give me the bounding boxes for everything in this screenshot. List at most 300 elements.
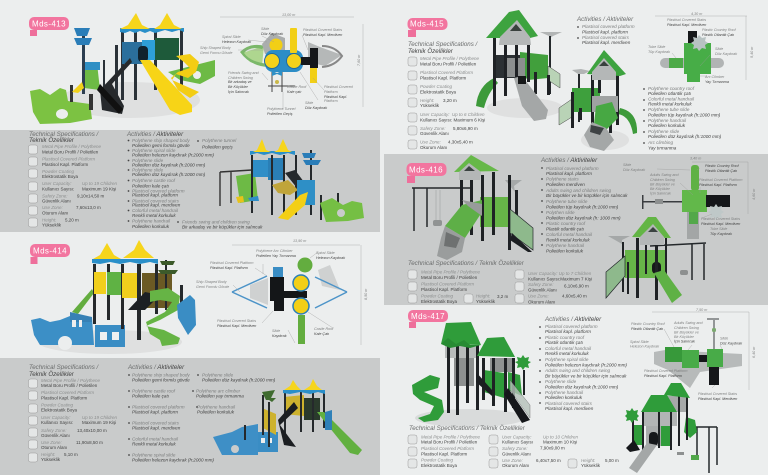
activities list: Plastik otlantik çatı [546, 226, 585, 232]
spec list: 3,20 m [443, 98, 457, 103]
plan drawing: Mds-413: Plastisol Covered Stairs [303, 28, 342, 32]
playground render: Mds-413 rear view [220, 139, 364, 222]
heading: technical specifications [29, 131, 100, 144]
activities list [539, 316, 627, 411]
spec list: 4,30x5,40 m [448, 140, 473, 144]
activities list: Plastik otlantik çatı [545, 340, 584, 345]
plan drawing: Mds-415: Arc Climber [704, 75, 725, 79]
spec list: Plastisol Covered Platform [420, 70, 473, 75]
plan drawing: Mds-415: Tüp Kaydırak [648, 50, 670, 54]
plan drawing: Mds-414: Polietilen Yay Tırmanma [256, 254, 296, 258]
spec list: Metal Boru Profili / Polietilen [421, 440, 478, 444]
plan drawing: Mds-416: Bir Küçükler [650, 187, 671, 191]
plan drawing: Mds-414: 13,90 m [293, 239, 306, 243]
spec list [408, 56, 485, 150]
plan drawing: Mds-417: 7,50 m [696, 308, 707, 312]
product tag: Mds-413 [29, 17, 69, 36]
plan drawing: Mds-417: Bir Küçükler [674, 335, 695, 339]
activities list [540, 157, 628, 254]
spec list: Safety Zone: [420, 126, 446, 131]
activities list: Plastisol covered platform [132, 404, 185, 410]
spec list: Use Zone: [528, 294, 550, 298]
spec list: Plastisol Covered Platform [421, 282, 474, 286]
activities list: Polietilen düz kaydırak (h:2000 mm) [132, 162, 206, 168]
activities list: Polietilen düz kaydırak (h:1000 mm) [545, 384, 619, 390]
activities list: Activities / Aktiviteler [544, 316, 602, 323]
plan drawing: Mds-413: Plastisol Covered [324, 85, 354, 89]
spec list: Powder Coating [42, 169, 75, 174]
activities list: Polythene castle roof [132, 388, 176, 394]
plan drawing: Mds-413: Castle Roof [287, 85, 307, 89]
activities list: Polietilen helezon kaydırak (h:2000 mm) [132, 152, 214, 158]
activities list: Polythene slide [202, 372, 234, 378]
activities list: Polythene handrail [132, 218, 171, 224]
plan drawing: Mds-415: Yay Tırmanma [705, 80, 729, 84]
activities list: Mds-415 bottom: Yay tırmanma [648, 146, 677, 150]
spec list: Plastisol Covered Platform [42, 156, 95, 162]
spec list: Up to 6 Children [452, 112, 485, 117]
activities list: Polythene spiral slide [132, 148, 176, 153]
spec list: 7,60x13,0 m [76, 205, 101, 210]
spec list: User Capacity: [41, 415, 71, 420]
spec list: 4,60x5,40 m [562, 294, 587, 298]
activities list: Polietilen geçiş [202, 144, 233, 150]
spec list: User Capacity: [502, 434, 532, 440]
product tag: Mds-417: Mds-417 [411, 312, 445, 321]
activities list: Colorful metal handrail [546, 232, 593, 237]
playground render: Mds-416 rear view [606, 217, 706, 303]
spec list: Plastisol Kapl. Platform [421, 452, 468, 456]
spec list: Safety Zone: [42, 194, 68, 198]
plan drawing: Mds-417: Plastisol Covered Platform [644, 369, 687, 373]
heading: technical specifications [408, 41, 479, 55]
plan drawing: Mds-413: Children Swing [228, 76, 254, 80]
panel: Mds-414 [30, 239, 368, 354]
activities list: Friends swing and children swing [182, 220, 250, 224]
plan drawing: Mds-415: Tube Slide [648, 45, 665, 49]
activities list: Polietilen korkuluk [132, 224, 170, 229]
spec list: Height: [581, 458, 596, 463]
panel: Mds-414 specifications [28, 364, 362, 462]
plan drawing: Mds-413: Polythene Tunnel [267, 107, 296, 111]
plan drawing: Mds-416: Plastisol Covered Platform [699, 178, 742, 182]
activities list: Bir arkadaş ve bir küçükler için salıncak [182, 224, 263, 230]
activities list: Polythene slide [545, 379, 577, 384]
plan drawing: Mds-413: Bir arkadaş ve [228, 80, 252, 84]
spec list: Metal Pipe Profile / Polythene [421, 270, 481, 274]
plan drawing: Mds-416: Bir Büyükler ve [650, 182, 675, 186]
activities list [126, 131, 263, 230]
spec list: Powder Coating [421, 294, 454, 298]
spec list: Güvenlik Alanı [502, 452, 531, 456]
playground render: Mds-414 [31, 240, 196, 354]
spec list: Okurum Alanı [502, 463, 529, 468]
plan drawing: Mds-416: Plastisol Kapl. Merdiven [701, 222, 740, 226]
activities list: Polythene tube slide [546, 199, 588, 204]
plan drawing: Mds-416: Tüp Kaydırak [710, 232, 732, 236]
plan drawing: Mds-414: Castle Roof [314, 327, 334, 331]
activities list: Plastisol kapl. platform [545, 329, 591, 334]
plan drawing: Mds-415: Slide [715, 47, 723, 51]
product tag: Mds-415 [408, 18, 448, 37]
spec list: 5,10 m [64, 452, 78, 457]
spec list: Yükseklik [476, 299, 496, 304]
panel: Mds-415 [408, 10, 754, 151]
activities list: Renkli metal korkuluk [132, 442, 176, 446]
spec list: Metal Boru Profili / Polietilen [421, 275, 478, 280]
playground render: Mds-416 front view [412, 155, 533, 260]
plan drawing: Mds-415: Plastik Otlantik Çatı [702, 33, 734, 37]
spec list: Metal Pipe Profile / Polythene [420, 56, 480, 61]
activities list: Polietilen gemi formlu gövde [132, 378, 190, 382]
activities list: Plastisol kapl. platform [132, 410, 178, 414]
activities list: Plastisol covered platform [132, 188, 185, 194]
activities list: Plastisol kapl. merdiven [132, 202, 181, 208]
plan drawing: Mds-413: 13,00 m [282, 13, 295, 17]
product tag: Mds-417 [408, 310, 448, 328]
plan drawing: Mds-415: Düz Kaydırak [715, 52, 737, 56]
activities list: Adults swing and children swing [545, 188, 612, 193]
activities list: Polythene ship shaped body [132, 138, 190, 143]
plan drawing: Mds-416: 3,40 m [690, 156, 701, 160]
activities list: Polietilen helezon kaydırak (h:2000 mm) [132, 458, 214, 462]
spec list: Elektrostatik Boya [41, 408, 78, 412]
activities list: Polythene slide [132, 168, 164, 172]
activities list: Renkli metal korkuluk [546, 238, 590, 242]
activities list: Polythene handrail [546, 243, 585, 248]
spec list: Powder Coating [41, 402, 74, 408]
spec list: Elektrostatik Boya [42, 174, 79, 179]
plan drawing: Mds-413: Kale çatı [287, 90, 301, 94]
plan drawing: Mds-416: 4,60 m [752, 189, 756, 200]
heading: technical specifications [29, 364, 100, 378]
plan drawing: Mds-417: Plastik Otlantik Çatı [631, 327, 663, 331]
plan drawing: Mds-414: Plastisol Kapl. Platform [210, 266, 248, 270]
plan drawing: Mds-416: Plastisol Kapl. Platform [699, 183, 737, 187]
spec list: Safety Zone: [41, 428, 67, 433]
activities list: Renkli metal korkuluk [545, 351, 589, 356]
plan drawing: Mds-415 [648, 12, 754, 84]
plan drawing: Mds-417: Düz Kaydırak [720, 342, 742, 346]
activities list: Polythene tunnel [202, 138, 237, 143]
plan drawing: Mds-417: Slide [720, 336, 728, 340]
plan drawing: Mds-416: Plastisol Covered Stairs [701, 217, 740, 221]
plan drawing: Mds-417: Plastic Country Roof [631, 322, 666, 326]
plan drawing: Mds-413: Helezon Kaydırak [222, 40, 251, 44]
plan drawing: Mds-416: Plastik Otlantik Çatı [705, 169, 737, 173]
activities list: Mds-415 bottom: Polietilen düz kaydırak (h:1000 mm) [648, 134, 722, 139]
plan drawing: Mds-415: Plastisol Kapl. Merdiven [667, 23, 706, 27]
spec list: 6,10x6,90 m [564, 284, 589, 288]
activities list: Colorful metal handrail [545, 346, 592, 351]
spec list: Güvenlik Alanı [420, 131, 449, 136]
plan drawing: Mds-414: Spiral Slide [316, 251, 335, 255]
plan drawing: Mds-413: Friends Swing and [228, 71, 259, 75]
plan drawing: Mds-414: Plastisol Kapl. Merdiven [217, 324, 256, 328]
spec list: Plastisol Kapl. Platform [41, 396, 88, 400]
spec list: Oturum Alanı [42, 210, 68, 216]
activities list: Plastisol kapl. merdiven [545, 406, 594, 411]
activities list: Polythene ship shaped body [132, 372, 190, 378]
spec list: Kullanıcı Sayısı: Maximum 6 Kişi [420, 118, 485, 122]
product tag: Mds-413: Mds-413 [32, 20, 66, 28]
activities list: Polietilen düz kaydırak (h:2000 mm) [202, 378, 276, 382]
playground render: Mds-417 rear view [625, 383, 717, 473]
spec list: Plastisol Covered Platform [421, 446, 474, 451]
spec list: Height: [42, 218, 57, 222]
spec list: Metal Pipe Profile / Polythene [421, 434, 481, 440]
spec list: Metal Boru Profili / Polietilen [41, 383, 98, 388]
spec list: Güvenlik Alanı [42, 198, 71, 204]
spec list: Maximum 10 Kişi [543, 440, 577, 444]
product tag: Mds-415: Mds-415 [410, 20, 444, 28]
spec list: Oturum Alanı [41, 445, 67, 450]
activities list: Plastisol kapl. merdiven [132, 426, 181, 430]
activities list: Polythene handrail [545, 390, 584, 395]
spec list: 5,80x6,90 m [453, 126, 478, 131]
heading: technical specifications: Technical Specifications / Teknik Özellikler [409, 425, 526, 432]
plan drawing: Mds-413: Slide [305, 101, 313, 105]
spec list: Height: [41, 452, 56, 457]
activities list: Mds-415 top: Plastisol covered platform [582, 24, 635, 29]
playground render: Mds-415 front view [476, 10, 563, 121]
spec list: User Capacity: Up to 7 Children [528, 271, 592, 276]
activities list: Polietilen düz kaydırak (h:1000 mm) [132, 172, 206, 177]
activities list: Polietilen tüp kaydırak (h:1000 mm) [546, 204, 619, 210]
plan drawing: Mds-413: Ship Shaped Body [200, 46, 232, 50]
plan drawing: Mds-417: Children Swing [674, 326, 700, 330]
plan drawing: Mds-417: Adults Swing and [673, 321, 703, 325]
plan drawing: Mds-416: Slide [623, 163, 631, 167]
activities list [127, 364, 276, 462]
plan drawing: Mds-413: Platform [324, 99, 338, 103]
plan drawing: Mds-415: Plastic Country Roof [702, 28, 737, 32]
heading: technical specifications: Teknik Özellikler [408, 48, 454, 55]
spec list: Metal Boru Profili / Polietilen [42, 150, 99, 154]
spec list: Use Zone: [420, 140, 442, 144]
heading: technical specifications: Technical Specifications / Teknik Özellikler [408, 260, 525, 267]
playground render: Mds-414 rear view [213, 379, 362, 455]
activities list: Colorful metal handrail [132, 208, 179, 213]
activities list: Polythene handrail [197, 404, 236, 410]
spec list: Yükseklik [581, 463, 601, 468]
plan drawing: Mds-415: 5,40 m [750, 47, 754, 58]
heading: technical specifications: Technical Specifications / [29, 364, 100, 371]
activities list: Polythene castle roof [132, 178, 176, 183]
plan drawing: Mds-413: 7,60 m [357, 55, 361, 66]
activities list: Renkli metal korkuluk [132, 213, 176, 218]
plan drawing: Mds-417 [630, 308, 756, 401]
spec list: Yükseklik [420, 103, 440, 108]
activities list: Mds-415 top: Plastisol kapl. platform [582, 30, 628, 34]
plan drawing: Mds-414: Kale Çatı [314, 332, 329, 336]
spec list: 9,10x14,50 m [77, 194, 105, 198]
activities list: Colorful metal handrail [132, 436, 179, 442]
spec list: Metal Pipe Profile / Polythene [42, 144, 102, 149]
activities list: Polietilen düz kaydırak (h: 1000 mm) [546, 216, 621, 220]
activities list: Plastisol covered stairs [132, 198, 180, 204]
activities list: Polietilen helezon kaydırak (h:2000 mm) [545, 362, 627, 368]
spec list [408, 434, 619, 468]
spec list: User Capacity: [420, 112, 450, 117]
spec list: Use Zone: [42, 205, 64, 210]
spec list: Metal Pipe Profile / Polythene [41, 378, 101, 383]
activities list: Plastisol covered platform [545, 324, 598, 329]
activities list: Plastic country roof [546, 221, 586, 226]
activities list: Adults swing and children swing [544, 368, 611, 373]
plan drawing: Mds-413: Plastisol Kapl. Merdiven [303, 33, 342, 37]
plan drawing: Mds-413: Düz Kaydırak [261, 32, 283, 36]
activities list: Mds-415 top: Plastisol covered stairs [582, 35, 630, 40]
plan drawing: Mds-413: Platform [324, 90, 338, 94]
activities list: Mds-415 top: Plastisol kapl. merdiven [582, 40, 631, 45]
activities list: Mds-415 bottom: Colorful metal handrail [648, 96, 695, 102]
spec list: Height: [420, 98, 435, 103]
plan drawing: Mds-414: Ship Shaped Body [196, 280, 228, 284]
activities list: Mds-415 bottom: Arc climbing [647, 140, 673, 145]
activities list: Bir büyükler ve bir küçükler için salıncak [546, 193, 628, 198]
spec list: Yükseklik [42, 222, 62, 228]
activities list: Polietilen korkuluk [546, 248, 584, 254]
plan drawing: Mds-414: Gemi Formlu Gövde [196, 285, 229, 289]
product tag: Mds-414: Mds-414 [33, 246, 67, 256]
playground render: Mds-413 [30, 13, 215, 124]
spec list [408, 270, 592, 304]
activities list: Mds-415 bottom [643, 86, 722, 150]
activities list: Plastisol kapl. platform [546, 171, 592, 176]
plan drawing: Mds-415: Plastisol Covered Stairs [667, 18, 706, 22]
spec list: 11,90x8,50 m [76, 440, 103, 445]
plan drawing: Mds-416: Düz Kaydırak [623, 168, 645, 172]
spec list: Safety Zone: [502, 446, 528, 451]
heading: technical specifications: Technical Specifications / [408, 41, 479, 48]
spec list: Güvenlik Alanı [41, 433, 70, 438]
activities list: Plastisol kapl. platform [132, 192, 178, 198]
activities list: Mds-415 bottom: Polietilen tüp kaydırak (h:1000 mm) [648, 112, 721, 118]
spec list: Up to 19 Children [82, 415, 118, 420]
activities list: Plastisol covered stairs [545, 401, 593, 406]
activities list: Mds-415 bottom: Polythene tube slide [648, 107, 690, 112]
spec list: User Capacity: [42, 181, 72, 186]
plan drawing: Mds-416: İçin Salıncak [650, 192, 671, 196]
plan drawing: Mds-417: Plastisol Kapl. Platform [644, 374, 682, 378]
activities list: Polietilen kale çatı [132, 394, 170, 398]
plan drawing: Mds-417: Spiral Slide [630, 340, 649, 344]
spec list: Elektrostatik Boya [421, 299, 458, 304]
plan drawing: Mds-413: Gemi Formu Gövde [200, 51, 232, 55]
spec list: Kullanıcı Sayısı [502, 440, 533, 444]
plan drawing: Mds-414 [196, 239, 368, 345]
plan drawing: Mds-416: Adults Swing and [649, 173, 679, 177]
spec list: Kullanıcı Sayısı: [42, 186, 74, 192]
activities list: Mds-415 bottom: Polietilen korkuluk [648, 123, 686, 128]
activities list: Mds-415 bottom: Polythene country roof [648, 86, 695, 91]
product tag: Mds-414 [30, 244, 70, 264]
plan drawing: Mds-417: Helezon Kaydırak [630, 344, 659, 348]
spec list: Okurum Alanı [528, 300, 555, 304]
plan drawing: Mds-417: Bir Büyükler ve [674, 330, 699, 334]
plan drawing: Mds-413: Bir Küçükler [228, 85, 249, 89]
activities list: Mds-415 bottom: Polietilen otlantik çatı [648, 91, 692, 96]
product tag: Mds-416 [406, 163, 446, 183]
plan drawing: Mds-417: Plastisol Kapl. Merdiven [698, 397, 737, 401]
plan drawing: Mds-414: Kaydırak [272, 334, 287, 338]
spec list: Güvenlik Alanı [528, 288, 557, 292]
spec list: Plastisol Kapl. Platform [42, 162, 89, 167]
spec list: Yükseklik [41, 457, 61, 462]
activities list: Activities / Aktiviteler [540, 157, 598, 164]
plan drawing: Mds-414: Plastisol Covered Platform [210, 261, 253, 265]
spec list: Metal Boru Profili / Polietilen [420, 62, 477, 66]
spec list: Use Zone: [41, 440, 63, 445]
spec list: 6,40x7,50 m [536, 458, 561, 463]
playground render: Mds-417 main view [412, 322, 531, 427]
activities list: Polythene spiral slide [545, 357, 589, 362]
heading: technical specifications: Teknik Özellikler [29, 371, 75, 378]
spec list: Elektrostatik Boya [420, 90, 457, 94]
spec list: 5,20 m [65, 218, 79, 222]
spec list: Powder Coating [420, 84, 453, 89]
playground render: Mds-415 rear view [559, 50, 637, 151]
spec list: Up to 19 Children [82, 181, 118, 186]
plan drawing: Mds-416: Children Swing [650, 178, 676, 182]
product tag: Mds-416: Mds-416 [409, 166, 443, 174]
activities list: Polietilen korkuluk [545, 395, 583, 400]
activities list: Polythen slide [546, 210, 575, 215]
plan drawing: Mds-414: 8,50 m [364, 289, 368, 300]
plan drawing: Mds-414: Slide [272, 329, 280, 333]
plan drawing: Mds-413 [200, 13, 363, 116]
spec list: Plastisol Kapl. Platform [421, 287, 468, 292]
activities list: Polietilen korkuluk [197, 410, 235, 414]
plan drawing: Mds-416: Plastic Country Roof [705, 164, 740, 168]
activities list: Activities / Aktiviteler [126, 131, 184, 138]
activities list: Polietilen yay tırmanma [196, 394, 244, 398]
spec list: Plastisol Kapl. Platform [420, 76, 467, 80]
panel: Mds-417 [408, 308, 756, 473]
plan drawing: Mds-417: 6,40 m [752, 347, 756, 358]
spec list: Plastisol Covered Platform [41, 390, 94, 395]
spec list: Elektrostatik Boya [421, 463, 458, 468]
spec list: Powder Coating [421, 458, 454, 462]
plan drawing: Mds-414: Polythene Arc Climber [256, 249, 293, 253]
spec list: Up to 10 Children [543, 434, 579, 440]
panel: Mds-416 [406, 155, 756, 304]
heading: technical specifications: Technical Specifications / [29, 131, 100, 138]
activities list: Activities / Aktiviteler [127, 364, 185, 371]
spec list: Okurum Alanı [420, 145, 447, 150]
plan drawing: Mds-417: Plastisol Covered Stairs [698, 392, 737, 396]
plan drawing: Mds-413: İçin Salıncak [228, 90, 249, 94]
plan drawing: Mds-414: Plastisol Covered Stairs [217, 319, 256, 323]
spec list [28, 144, 118, 228]
spec list [28, 378, 118, 462]
activities list: Mds-415 top [576, 16, 635, 45]
spec list: 13,40x10,00 m [77, 428, 107, 433]
activities list: Plastisol covered platform [546, 166, 599, 171]
spec list: 5,00 m [605, 458, 619, 463]
activities list: Plastic country roof [545, 335, 585, 340]
activities list: Polietilen gemi formlu gövde [132, 143, 190, 148]
activities list: Polietilen merdiven [546, 182, 585, 187]
activities list: Polietilen kale çatı [132, 184, 170, 188]
spec list: Kullanıcı Sayısı:Maximum 7 Kişi [528, 276, 592, 282]
plan drawing: Mds-415: 4,30 m [691, 12, 702, 16]
spec list: Safety Zone: [528, 282, 554, 287]
plan drawing: Mds-413: Plastisol Kapl. [324, 95, 347, 99]
activities list: Mds-415 top: Activities / Aktiviteler [576, 16, 634, 23]
activities list: Mds-415 bottom: Polythene slide [648, 129, 680, 134]
